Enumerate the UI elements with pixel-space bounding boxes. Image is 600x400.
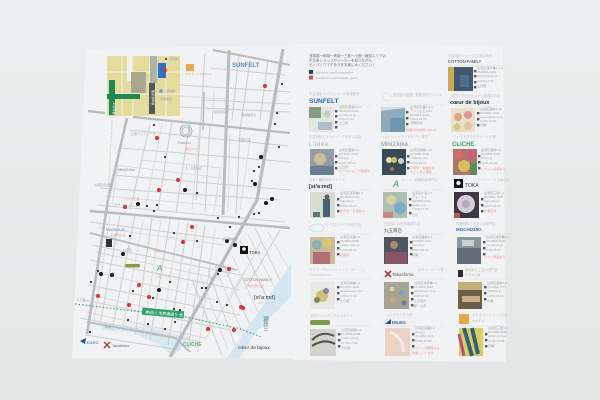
shop: st'a:md: [st'a:md] — [309, 184, 332, 190]
map annotations: 広重アンティーク — [131, 131, 155, 136]
shop: script A: 03-5809-0011 — [412, 199, 431, 203]
shop: shop with counter — [455, 267, 515, 309]
shop: coeur de bijoux: 手作りアクセサリーと雑貨のお店 — [451, 93, 501, 98]
shop: L'idee: 土日祝 — [339, 164, 349, 169]
shop: TOKA: 03-3851-7878 — [484, 195, 504, 199]
social links: instagram.com/kuragae_guide — [316, 76, 358, 80]
shop: green tag logo: 11:00-17:00 — [341, 341, 358, 345]
shop: orange logo: 03-3864-6685 — [488, 330, 508, 334]
shop: Takashima — [381, 267, 445, 309]
shop markers: small black — [89, 83, 283, 333]
shop: coeur de bijoux: 月曜 — [480, 122, 486, 127]
shop: CLICHE: CLICHE — [452, 142, 474, 148]
shop: SUNFELT: 土日祝 — [339, 120, 349, 125]
shop: green flower logo: maru5.jp — [412, 243, 424, 247]
shop: shop with counter: craftsha.jp — [487, 289, 502, 293]
shop: SUNFELT: SUNFELT — [309, 98, 339, 105]
shop: script A: atelier-a.jp — [412, 203, 427, 207]
panel: map page — [72, 45, 293, 358]
shop: DILEG — [381, 312, 445, 356]
shop: TOKA: toka-toka.jp — [484, 199, 500, 203]
shop: pale logo: flowermood.com — [340, 289, 363, 293]
shop: DILEG: 03-3861-1111 — [415, 334, 434, 338]
shop: blue building: 日曜定休 — [410, 120, 423, 125]
map annotations: 浅草橋駅前 — [222, 236, 237, 241]
social links — [309, 70, 358, 80]
shop: script A: 日月 — [412, 213, 418, 217]
logo: SUNFELT on map: SUNFELT — [232, 63, 260, 69]
shop: L'idee: lidee.jp — [339, 156, 349, 160]
shop: SUNFELT: 9:00-17:30 — [339, 117, 354, 121]
shop: CLICHE: cliche.jp — [481, 156, 492, 160]
shop: DILEG: ハンカチと布小物 — [386, 312, 413, 317]
shop: green flower logo: 古道具と手作り雑貨の店 — [384, 221, 421, 226]
shop: green tag logo — [309, 313, 372, 356]
shop: MiniJJuka: 不定休・営業日は — [410, 165, 435, 170]
shop: light blue circle logo: 10:00-18:00 — [340, 248, 357, 252]
shop: coeur de bijoux: 03-5823-1234 — [480, 111, 500, 115]
shop: blue building: アトリエビル2F — [410, 108, 432, 113]
shop: green flower logo: 月曜 — [412, 252, 418, 257]
map inset: station area: 蔵前橋 — [166, 88, 175, 93]
icon: orange marker — [186, 64, 194, 71]
map inset: station area: JR浅草橋 — [112, 102, 117, 115]
road network — [80, 53, 290, 355]
secondary streets — [86, 92, 288, 352]
map annotations: 台東区 — [123, 247, 132, 252]
shop: Takashima: takashima.co.jp — [414, 289, 436, 293]
map annotations: ミシン工房 — [124, 196, 139, 201]
shop: SUNFELT: sunfelt.co.jp — [339, 113, 356, 117]
shop: shop with counter: 03-3864-7777 — [487, 285, 507, 289]
river: Sumida — [227, 263, 291, 358]
shop: green tag logo: 手作りバッグとテキスタイル — [310, 313, 353, 318]
shop: orange logo: ガラスペンとインクの店 — [472, 312, 509, 317]
shop: script A: アトリエA — [412, 194, 427, 199]
shop: blue building: 10:00-18:00 — [410, 117, 427, 121]
shop: DILEG: 10:00-17:00 — [415, 339, 432, 343]
social links: facebook.com/kuragebashi — [316, 70, 353, 74]
shop: pale logo: FlowerMood — [309, 272, 331, 277]
shop label: orange: カキモリ・inkstand — [185, 71, 212, 76]
shop: shop with counter: クラフト社 — [465, 272, 480, 277]
map annotations: 手芸の店 — [238, 137, 250, 142]
shop: CLICHE — [452, 134, 506, 175]
map inset: station area — [107, 56, 180, 116]
shop: L'idee: L'idée — [309, 142, 329, 148]
shop: green tag logo: 台東区柳橋1-9 — [341, 327, 361, 332]
map inset: station area: 馬喰町 — [170, 56, 179, 61]
label: river name: 隅田川 — [262, 316, 269, 331]
logo: Carton: Kanton — [178, 140, 191, 145]
shop: CLICHE: 台東区蔵前2-6 — [481, 147, 501, 152]
logo: CLICHE on map: CLICHE — [183, 342, 202, 348]
shop: COTTON FAMILY: COTTON FAMILY — [448, 59, 482, 64]
shop: green flower logo: 台東区蔵前1-3 — [412, 234, 432, 239]
shop: MiniJJuka: 台東区柳橋1-12 — [410, 147, 432, 152]
shop: blue building: 営業日はお問い合わせ — [406, 127, 437, 132]
shop: green tag logo: textile-bag.jp — [341, 336, 359, 340]
shop: COTTON FAMILY: 手芸用品ショップ 生地の卸売 — [448, 53, 492, 58]
shop: TOKA: TOKA — [465, 183, 479, 189]
map inset: station area: 浅草橋駅 — [160, 96, 172, 101]
shop: COTTON FAMILY: 土日祝 — [477, 83, 487, 88]
map annotations: 台東区役所 — [213, 109, 228, 114]
shop: blue building: 台東区鳥越1-2-3 — [410, 104, 433, 109]
shop: pale logo — [309, 267, 372, 309]
shop: L'idee: 手芸材料とアンティークボタンの店 — [309, 134, 362, 139]
logo: L'idee on map: L'idée — [186, 166, 202, 172]
shop: blue building — [381, 92, 445, 132]
shop: orange logo: kakimori.com — [488, 334, 507, 338]
shop: light blue circle logo: ビーズとパーツの専門店 — [325, 222, 362, 227]
shop: DILEG: 台東区鳥越2-2 — [415, 325, 435, 330]
shop: Takashima: 9:00-17:00 — [414, 294, 429, 298]
logo: Takashima on map: Takashima — [112, 344, 129, 348]
shop: st'a:md: 03-3864-0101 — [340, 195, 360, 199]
shop: coeur de bijoux: 台東区蔵前4-20 — [480, 106, 502, 111]
shop: shop with counter: 水曜 — [487, 298, 493, 303]
shop: TOKA: 10:00-18:00 — [484, 204, 501, 208]
shop: blue building: 紙製品の製造 · 卸販売のアトリエ — [393, 92, 443, 97]
shop: DILEG: DILEG — [392, 320, 406, 325]
logo: DILEG on map — [80, 338, 98, 345]
map annotations: 布の専門店 — [248, 283, 263, 288]
shop: TOKA: 台東区三筋2-1 — [484, 190, 504, 195]
shop: CLICHE: 03-5835-2020 — [481, 152, 501, 156]
map annotations: ギャラリー — [258, 300, 273, 305]
map annotations: 柳橋 — [105, 324, 111, 329]
map inset: station area: 都営浅草線 — [151, 90, 156, 105]
shop: MiniJJuka — [381, 134, 435, 175]
shop: MOCHIZUKI: 03-3861-9090 — [486, 239, 506, 243]
shop: script A: 10:00-17:00 — [412, 207, 429, 211]
shop: Takashima: 03-3851-3210 — [414, 285, 434, 289]
shop: COTTON FAMILY: cotton-family.jp — [477, 74, 498, 78]
map annotations: 清洲橋通り — [241, 112, 256, 117]
shop: MiniJJuka: MiniJJuka — [381, 142, 408, 148]
shop: COTTON FAMILY — [448, 53, 508, 91]
map annotations: 台東区民会館 — [94, 182, 113, 187]
shop: green flower logo — [381, 221, 445, 264]
logo: st'a:md on map: [st'a:md] — [254, 295, 275, 301]
shop: script A: 台東区小島1-5 — [412, 190, 432, 195]
shop: orange logo — [455, 312, 515, 356]
shop: orange logo: 11:00-19:00 — [488, 339, 505, 343]
shop: orange logo: 台東区三筋1-6 — [488, 325, 508, 330]
shop: SUNFELT: 手芸用品 エコフェルトの製造販売 — [309, 91, 360, 96]
shop: SUNFELT: 台東区蔵前3-1-4 — [339, 104, 362, 109]
shop: L'idee: 10:00-18:00 — [339, 161, 356, 165]
shop: MiniJJuka: ハンドメイドアクセサリー 雑貨 — [381, 134, 429, 139]
intro text: モノづくりマチ歩きをお楽しみください！ — [309, 62, 376, 67]
shop: MOCHIZUKI: 洋裁材料とボタンの専門店 — [456, 221, 496, 226]
logo: DILEG on map: DILEG — [87, 341, 98, 345]
shop: st'a:md: 毛糸と編み物のアトリエ — [309, 177, 346, 182]
panel: shop directory page — [293, 44, 515, 362]
shop: script A — [381, 177, 445, 218]
shop: COTTON FAMILY: 03-3866-2201 — [477, 70, 497, 74]
shop: coeur de bijoux: 11:00-18:00 — [480, 119, 497, 123]
shop: Takashima: ボタン · パーツ卸 — [418, 267, 445, 272]
shop: MOCHIZUKI: 9:00-18:00 — [486, 248, 501, 252]
shop: MiniJJuka: サイトをご確認 — [410, 169, 433, 174]
shop: orange logo: 月曜 — [488, 343, 494, 348]
shop: pale logo: 03-3862-1234 — [340, 285, 360, 289]
shop: green tag logo: 03-3862-8888 — [341, 332, 361, 336]
shop: DILEG: 営業しています — [412, 350, 434, 355]
logo: Takashima on map — [104, 342, 129, 348]
shop: green flower logo: 03-5833-1212 — [412, 239, 432, 243]
shop: Takashima: 土日祝休 — [414, 298, 427, 303]
shop: SUNFELT: 03-3851-0121 — [339, 109, 359, 113]
logo: Kakimori circle — [180, 125, 192, 137]
shop: DILEG: dileg.jp — [415, 330, 425, 334]
shop: MiniJJuka: 12:00-19:00 — [410, 161, 427, 165]
green dotted line — [75, 204, 262, 337]
shop: TOKA — [453, 177, 512, 218]
shop: light blue circle logo: 日祝休 — [340, 252, 350, 257]
map annotations: 工房アルテ — [155, 273, 170, 278]
logo: MOCHIZUKI on map: MOCHIZUKI — [106, 228, 125, 232]
shop: green flower logo: 10:00-18:00 — [412, 248, 429, 252]
shop: st'a:md — [309, 177, 372, 218]
shop: MOCHIZUKI: ボタン教室あり — [484, 254, 506, 259]
logo: green script A: A — [156, 264, 162, 273]
shop: coeur de bijoux — [450, 93, 510, 132]
shop: MOCHIZUKI: MOCHIZUKI — [456, 227, 482, 232]
map annotations — [76, 109, 273, 329]
logo: TOKA on map: TOKA — [249, 250, 261, 255]
shop: st'a:md: staamd.jp — [340, 199, 354, 203]
shop: coeur de bijoux: cœur de bijoux — [450, 100, 490, 106]
shop: light blue circle logo: 03-3863-5566 — [340, 239, 360, 243]
shop: shop with counter: 革材料と工具の専門店 — [465, 267, 499, 272]
shop: MOCHIZUKI — [453, 221, 512, 264]
major roads — [87, 49, 290, 357]
map annotations: 手芸洋品店 — [110, 232, 125, 237]
shop: light blue circle logo — [309, 222, 372, 264]
logo: COTTON FAMILY on map: COTTON FAMILY — [243, 278, 272, 282]
shop: MiniJJuka: 03-3866-4545 — [410, 152, 430, 156]
shop: pale logo: 10:00-17:00 — [340, 294, 357, 298]
shop: pale logo: 土日祝 — [340, 298, 350, 303]
shop: COTTON FAMILY: 台東区浅草橋1-7-3 — [477, 65, 503, 70]
shop: MOCHIZUKI: mochizuki.jp — [486, 243, 503, 247]
shop: script A: A — [392, 179, 399, 189]
shop: Takashima: 台東区浅草橋3-2 — [414, 280, 437, 285]
map annotations: 雑貨カフェ — [185, 146, 200, 151]
shop: CLICHE: イベント情報あり — [481, 166, 506, 171]
shop: shop with counter: 10:00-18:00 — [487, 294, 504, 298]
shop: L'idee — [309, 134, 370, 175]
shop: shop with counter: 台東区蔵前3-8 — [487, 280, 507, 285]
shop: st'a:md: 10:00-18:00 — [340, 204, 357, 208]
shop markers: red — [96, 84, 267, 332]
intro text: 手芸系ショップやメーカーを巡りながら — [309, 58, 372, 62]
shop: MOCHIZUKI: 台東区浅草橋4-1 — [486, 234, 509, 239]
shop: script A: レース · 刺繍用品専門店 — [402, 177, 438, 182]
shop: blue building: 03-3861-0201 — [410, 113, 430, 117]
logo: shop icon — [106, 239, 112, 247]
green sign: street name: 神田川 浅草橋通り 東 — [145, 308, 183, 318]
shop: light blue circle logo: 台東区鳥越2-8 — [340, 234, 360, 239]
shop: TOKA: 水曜定休 — [484, 208, 497, 213]
shop: pale logo: 台東区柳橋2-3 — [340, 280, 360, 285]
shop: Takashima: Takashima — [392, 272, 414, 277]
shop: TOKA: アンティーク生地の店 — [477, 177, 510, 182]
shop: st'a:md: 台東区浅草橋2-4 — [340, 190, 363, 195]
shop: SUNFELT — [309, 91, 372, 132]
shop: COTTON FAMILY: 10:00-17:00 — [477, 79, 494, 83]
logo: TOKA on map — [240, 246, 261, 255]
shop: DILEG: イベント開催時のみ — [412, 345, 440, 350]
logo: green and yellow tag — [125, 264, 140, 267]
shop: L'idee: 03-5820-1010 — [339, 152, 359, 156]
shop: green flower logo: 丸五商店 — [384, 227, 402, 234]
shop: pale logo: フラワーアレンジメントとコサージュ — [309, 267, 365, 272]
map annotations: 八丁堀 — [76, 297, 85, 302]
logo: coeur de bijoux on map: cœur de bijoux — [238, 345, 270, 351]
shop: CLICHE: フェルトアクセサリーと小物 — [453, 134, 496, 139]
logo: MiniJJuka on map: MiniJiJka — [118, 167, 135, 172]
shop: L'idee: 台東区蔵前4-5 — [339, 147, 359, 152]
canal — [102, 323, 190, 357]
shop: green tag logo: 土日祝 — [341, 345, 351, 350]
intro text — [309, 53, 386, 67]
shop: coeur de bijoux: coeurdebijoux.jp — [480, 115, 503, 119]
shop: orange logo: カキモリ — [472, 318, 484, 323]
shop: light blue circle logo: beads-shop.jp — [340, 243, 360, 247]
shop: MiniJJuka: minijuka.com — [410, 156, 428, 160]
shop: Takashima: 卸・小売 — [414, 303, 426, 308]
map annotations: 小島ビル — [153, 248, 165, 253]
intro text: 浅草橋〜柳橋〜鳥越〜三筋〜小島〜蔵前エリアの — [309, 53, 386, 58]
shop: st'a:md: 要予約・日祝休み — [340, 208, 365, 213]
shop markers: large black — [99, 155, 274, 292]
shop: L'idee: ワークショップ開催中 — [339, 168, 370, 173]
shop: CLICHE: 11:00-18:00 — [481, 161, 498, 165]
